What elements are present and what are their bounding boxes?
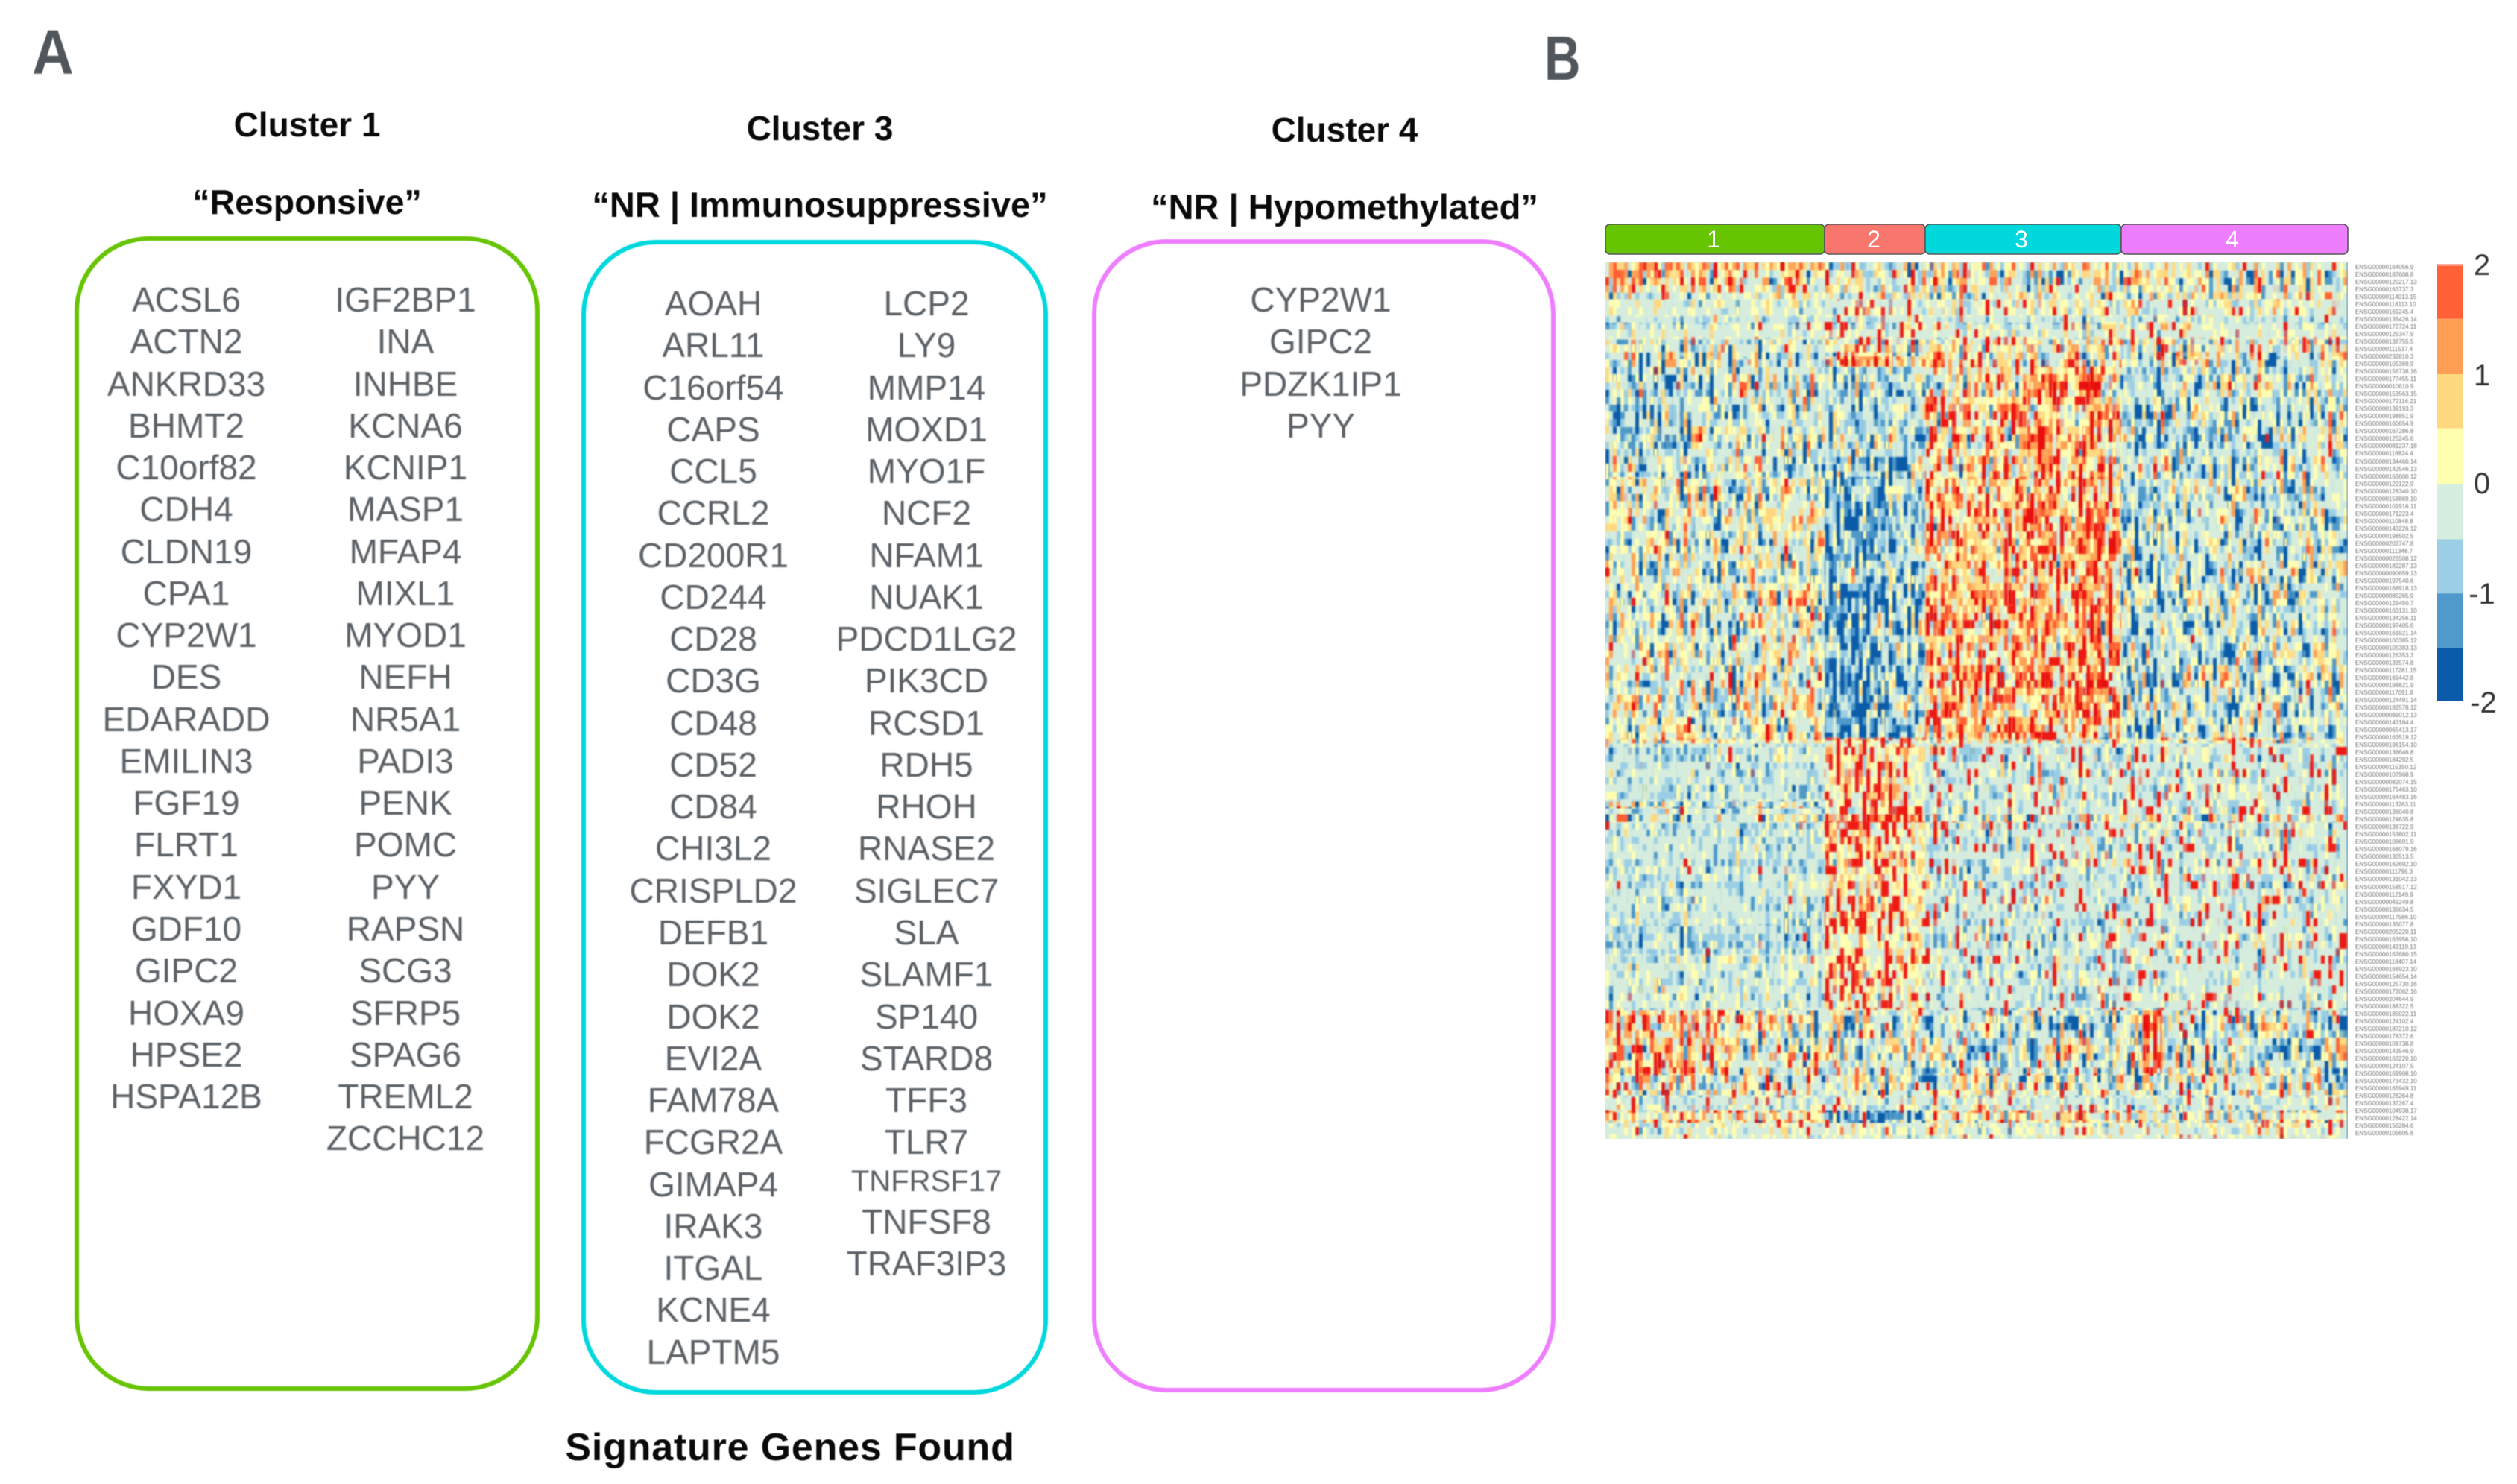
- gene list: cluster 1 column 1: CYP2W1: [116, 616, 257, 654]
- heatmap row labels: ENSG00000124102.4: [2355, 1018, 2414, 1025]
- gene list: cluster 3 column 2: SLAMF1: [860, 955, 993, 994]
- annotation: cluster 4: [2121, 224, 2348, 254]
- heatmap row labels: ENSG00000105383.13: [2355, 645, 2417, 651]
- gene list: cluster 4: CYP2W1: [1250, 280, 1392, 319]
- gene list: cluster 3 column 1: GIMAP4: [648, 1165, 778, 1204]
- gene list: cluster 3 column 1: IRAK3: [664, 1207, 762, 1245]
- gene list: cluster 1 column 1: EDARADD: [103, 700, 270, 739]
- gene list: cluster 1 column 2: SPAG6: [350, 1035, 461, 1074]
- heatmap row labels: ENSG00000131042.13: [2355, 876, 2417, 882]
- heatmap row labels: ENSG00000178372.6: [2355, 1033, 2414, 1040]
- main block, cluster 3: [1925, 367, 1983, 477]
- gene list: cluster 1 column 1: FXYD1: [131, 868, 241, 906]
- gene list: cluster 4: [1239, 280, 1402, 445]
- heatmap row labels: ENSG00000198851.9: [2355, 413, 2414, 420]
- heatmap row labels: ENSG00000171223.4: [2355, 511, 2414, 517]
- heatmap row labels: ENSG00000162692.10: [2355, 861, 2417, 868]
- panel: cluster 4 pink outline: [1092, 239, 1556, 1392]
- heatmap row labels: ENSG00000114013.15: [2355, 294, 2417, 300]
- heatmap row labels: ENSG00000118113.10: [2355, 301, 2416, 308]
- gene list: cluster 1 column 1: HOXA9: [128, 994, 244, 1032]
- colour scale legend: 2: [2474, 249, 2490, 282]
- heatmap row labels: ENSG00000101916.11: [2355, 503, 2417, 510]
- heatmap row labels: ENSG00000184292.5: [2355, 757, 2414, 763]
- caption: Signature Genes Found: Signature Genes Found: [565, 1426, 1015, 1469]
- heatmap row labels: ENSG00000138646.8: [2355, 749, 2414, 756]
- panel letter A: A: [32, 17, 74, 87]
- main block, cluster 1: [1605, 367, 1684, 477]
- heatmap row labels: ENSG00000175463.10: [2355, 786, 2417, 793]
- annotation: cluster 2: [1825, 224, 1925, 254]
- heatmap row labels: ENSG00000117091.8: [2355, 689, 2413, 696]
- heatmap row labels: ENSG00000125730.16: [2355, 981, 2417, 988]
- heatmap row labels: ENSG00000163220.10: [2355, 1055, 2417, 1062]
- heatmap row labels: ENSG00000124107.5: [2355, 1063, 2414, 1070]
- heatmap row labels: ENSG00000163131.10: [2355, 607, 2417, 614]
- heatmap row labels: ENSG00000232810.3: [2355, 353, 2414, 360]
- heatmap row labels: ENSG00000128422.14: [2355, 1115, 2417, 1122]
- heatmap row labels: ENSG00000109738.8: [2355, 1041, 2414, 1047]
- heatmap row labels: ENSG00000172116.21: [2355, 398, 2417, 405]
- heatmap row labels: ENSG00000122122.9: [2355, 481, 2414, 487]
- heatmap row labels: ENSG00000135077.8: [2355, 921, 2414, 928]
- heatmap row labels: ENSG00000169245.4: [2355, 309, 2414, 315]
- heatmap row labels: ENSG00000065413.17: [2355, 727, 2417, 733]
- heatmap row labels: ENSG00000154654.14: [2355, 973, 2417, 980]
- heatmap annotation bar with clusters 1 to 4: [1605, 224, 2348, 254]
- heatmap row labels: ENSG00000167286.8: [2355, 428, 2414, 435]
- colour scale legend: -1: [2469, 578, 2495, 610]
- gene list: cluster 4: GIPC2: [1269, 322, 1372, 361]
- heatmap row labels: ENSG00000104938.17: [2355, 1108, 2417, 1114]
- heatmap row labels: [2355, 264, 2417, 1137]
- heatmap row labels: ENSG00000177455.11: [2355, 376, 2417, 382]
- gene list: cluster 3 column 2: SIGLEC7: [854, 871, 999, 910]
- heatmap row labels: ENSG00000124635.8: [2355, 816, 2414, 823]
- heatmap row labels: ENSG00000130513.5: [2355, 853, 2414, 860]
- gene list: cluster 1 column 1: FGF19: [133, 783, 240, 822]
- gene list: cluster 1 column 1: CPA1: [143, 574, 230, 613]
- gene list: cluster 3 column 2: NUAK1: [869, 578, 984, 616]
- gene list: cluster 3 column 2: [836, 284, 1017, 1283]
- heatmap row labels: ENSG00000135426.14: [2355, 316, 2417, 323]
- heatmap row labels: ENSG00000172724.11: [2355, 323, 2417, 330]
- gene list: cluster 3 column 1: FAM78A: [648, 1081, 779, 1120]
- heatmap row labels: ENSG00000182287.13: [2355, 563, 2417, 569]
- colour scale legend: 0: [2474, 467, 2490, 500]
- heatmap row labels: ENSG00000204644.9: [2355, 996, 2414, 1003]
- gene list: cluster 3 column 1: CD3G: [666, 661, 761, 700]
- heatmap row labels: ENSG00000128340.10: [2355, 488, 2417, 495]
- gene list: cluster 3 column 1: C16orf54: [642, 368, 784, 407]
- heatmap row labels: ENSG00000111537.4: [2355, 346, 2413, 353]
- heatmap row labels: ENSG00000126353.3: [2355, 652, 2414, 659]
- heading: Cluster 1: Cluster 1: [234, 105, 380, 144]
- heatmap row labels: ENSG00000108691.9: [2355, 839, 2414, 845]
- heatmap row labels: ENSG00000172062.16: [2355, 988, 2417, 995]
- gene list: cluster 3 column 1: KCNE4: [656, 1290, 771, 1329]
- heatmap row labels: ENSG00000125347.9: [2355, 331, 2414, 338]
- heatmap row labels: ENSG00000198502.5: [2355, 533, 2414, 540]
- heatmap row labels: ENSG00000115350.12: [2355, 764, 2417, 771]
- heatmap row labels: ENSG00000111348.7: [2355, 548, 2413, 555]
- heatmap row labels: ENSG00000138722.9: [2355, 824, 2414, 830]
- heatmap row labels: ENSG00000081237.18: [2355, 443, 2417, 449]
- heatmap row labels: ENSG00000136634.5: [2355, 906, 2414, 913]
- panel A: signature gene lists: [32, 17, 1556, 1469]
- heatmap row labels: ENSG00000168079.16: [2355, 846, 2417, 853]
- gene list: cluster 3 column 2: RCSD1: [868, 704, 985, 742]
- gene list: cluster 1 column 1: BHMT2: [128, 406, 244, 445]
- heatmap row labels: ENSG00000156284.6: [2355, 1123, 2414, 1129]
- gene list: cluster 3 column 2: TRAF3IP3: [847, 1244, 1006, 1283]
- heatmap row labels: ENSG00000197405.6: [2355, 622, 2414, 629]
- heatmap row labels: ENSG00000113263.11: [2355, 801, 2416, 808]
- gene list: cluster 3 column 2: TLR7 TNFSF8: [862, 1123, 991, 1241]
- heatmap row labels: ENSG00000124491.14: [2355, 697, 2417, 704]
- heatmap row labels: ENSG00000136040.8: [2355, 809, 2414, 815]
- heatmap row labels: ENSG00000118407.14: [2355, 959, 2417, 965]
- gene list: cluster 3 column 2: RDH5: [879, 745, 973, 784]
- gene list: cluster 1 column 2: SCG3: [359, 951, 452, 990]
- gene list: cluster 1 column 1: HSPA12B: [110, 1077, 262, 1116]
- heatmap row labels: ENSG00000010610.9: [2355, 383, 2414, 390]
- gene list: cluster 4: PDZK1IP1: [1239, 364, 1402, 403]
- heatmap row labels: ENSG00000164483.16: [2355, 794, 2417, 801]
- gene list: cluster 1 column 1: GDF10: [131, 909, 241, 948]
- panel: cluster 1 green outline: [75, 236, 540, 1391]
- gene list: cluster 3 column 2: TNFRSF17: [851, 1165, 1002, 1198]
- heatmap row labels: ENSG00000158869.10: [2355, 496, 2417, 502]
- heatmap row labels: ENSG00000089012.13: [2355, 712, 2417, 719]
- gene list: cluster 1 column 2: NEFH: [359, 657, 452, 696]
- heatmap row labels: ENSG00000187608.8: [2355, 271, 2414, 278]
- gene list: cluster 3 column 2: TFF3: [885, 1081, 967, 1120]
- gene list: cluster 1 column 1: [103, 280, 270, 1116]
- heatmap row labels: ENSG00000134460.14: [2355, 458, 2417, 465]
- gene list: cluster 3 column 1: CHI3L2: [655, 829, 771, 868]
- gene list: cluster 3 column 2: STARD8: [860, 1039, 993, 1078]
- gene list: cluster 1 column 2: INHBE: [353, 364, 458, 403]
- main block, cluster 2: [1825, 367, 1925, 462]
- heatmap row labels: ENSG00000129450.7: [2355, 600, 2414, 607]
- heatmap row labels: ENSG00000182578.12: [2355, 704, 2417, 711]
- heatmap row labels: ENSG00000090659.13: [2355, 570, 2417, 577]
- annotation: cluster 3: 3: [2015, 226, 2028, 253]
- gene list: cluster 3 column 2: SLA: [894, 913, 959, 952]
- heatmap row labels: ENSG00000168918.13: [2355, 585, 2417, 592]
- gene list: cluster 1 column 2: PADI3: [357, 742, 454, 780]
- gene list: cluster 1 column 2: RAPSN: [347, 909, 464, 948]
- heatmap row labels: ENSG00000205220.11: [2355, 929, 2417, 935]
- gene list: cluster 3 column 1: CD244: [660, 578, 767, 616]
- heatmap row labels: ENSG00000139193.3: [2355, 405, 2414, 412]
- gene list: cluster 1 column 2: MFAP4: [350, 532, 461, 571]
- heatmap row labels: ENSG00000111796.3: [2355, 868, 2413, 875]
- gene list: cluster 3 column 1: DOK2: [666, 997, 760, 1036]
- gene list: cluster 3 column 2: MMP14: [868, 368, 985, 407]
- heatmap row labels: ENSG00000166923.10: [2355, 966, 2417, 973]
- gene list: cluster 3 column 2: PDCD1LG2: [836, 619, 1017, 658]
- heatmap row labels: ENSG00000173432.10: [2355, 1078, 2417, 1084]
- annotation: cluster 2: 2: [1867, 226, 1880, 253]
- gene list: cluster 1 column 1: HPSE2: [130, 1035, 242, 1074]
- heatmap row labels: ENSG00000161921.14: [2355, 630, 2417, 637]
- heatmap row labels: ENSG00000185022.11: [2355, 1011, 2417, 1017]
- gene list: cluster 1 column 2: KCNIP1: [344, 448, 467, 487]
- gene list: cluster 1 column 2: TREML2: [338, 1077, 473, 1116]
- heatmap row labels: ENSG00000203747.8: [2355, 540, 2414, 547]
- heading: Cluster 4: Cluster 4: [1272, 110, 1418, 149]
- gene list: cluster 1 column 2: MIXL1: [356, 574, 455, 613]
- gene list: cluster 1 column 2: PENK: [359, 783, 452, 822]
- heatmap cells: [1605, 262, 2348, 1139]
- gene list: cluster 1 column 1: GIPC2: [135, 951, 238, 990]
- main block, cluster 4: [2121, 367, 2161, 738]
- annotation: cluster 3: [1925, 224, 2121, 254]
- panel letter B: B: [1544, 23, 1581, 93]
- gene list: cluster 1 column 2: IGF2BP1: [335, 280, 476, 319]
- gene list: cluster 3 column 2: NFAM1: [869, 536, 984, 575]
- heatmap row labels: ENSG00000169442.8: [2355, 675, 2414, 681]
- gene list: cluster 3 column 1: DEFB1: [658, 913, 768, 952]
- gene list: cluster 1 column 2: KCNA6: [348, 406, 463, 445]
- annotation: cluster 1: [1605, 224, 1825, 254]
- gene list: cluster 1 column 1: ACSL6: [132, 280, 241, 319]
- gene list: cluster 3 column 2: RNASE2: [858, 829, 995, 868]
- heatmap row labels: ENSG00000085265.9: [2355, 593, 2414, 599]
- heatmap row labels: ENSG00000163519.12: [2355, 734, 2417, 741]
- gene list: cluster 1 column 2: NR5A1: [350, 700, 461, 739]
- heatmap row labels: ENSG00000167680.15: [2355, 951, 2417, 958]
- gene list: cluster 3 column 1: AOAH: [665, 284, 762, 323]
- heatmap row labels: ENSG00000112149.9: [2355, 891, 2413, 898]
- gene list: cluster 3 column 1: CCL5: [669, 452, 757, 490]
- heatmap row labels: ENSG00000138755.5: [2355, 338, 2414, 345]
- heatmap row labels: ENSG00000117586.10: [2355, 914, 2417, 921]
- heatmap row labels: ENSG00000134256.11: [2355, 615, 2417, 622]
- heatmap row labels: ENSG00000143546.9: [2355, 1048, 2414, 1055]
- heatmap row labels: ENSG00000026508.12: [2355, 555, 2417, 562]
- heatmap row labels: ENSG00000105369.9: [2355, 361, 2414, 367]
- heatmap row labels: ENSG00000163600.12: [2355, 473, 2417, 480]
- gene list: cluster 1 column 1: ACTN2: [130, 322, 242, 361]
- heatmap row labels: ENSG00000156738.16: [2355, 368, 2417, 375]
- heatmap row labels: ENSG00000133574.8: [2355, 660, 2414, 666]
- heatmap row labels: ENSG00000137267.4: [2355, 1100, 2414, 1107]
- heatmap row labels: ENSG00000198821.9: [2355, 682, 2414, 689]
- gene list: cluster 3 column 1: DOK2: [666, 955, 760, 994]
- gene list: cluster 1 column 1: ANKRD33: [107, 364, 265, 403]
- heatmap row labels: ENSG00000105605.6: [2355, 1130, 2414, 1137]
- heading: NR Hypomethylated: “NR | Hypomethylated”: [1151, 187, 1538, 227]
- heatmap row labels: ENSG00000143184.4: [2355, 719, 2414, 726]
- gene list: cluster 3 column 2: PIK3CD: [865, 661, 988, 700]
- heatmap row labels: ENSG00000187210.12: [2355, 1026, 2417, 1032]
- gene list: cluster 1 column 2: SFRP5: [350, 994, 461, 1032]
- heatmap row labels: ENSG00000158517.12: [2355, 884, 2417, 891]
- gene list: cluster 3 column 2: LCP2: [883, 284, 970, 323]
- heatmap row labels: ENSG00000196154.10: [2355, 742, 2417, 748]
- heatmap row labels: ENSG00000153563.15: [2355, 391, 2417, 397]
- gene list: cluster 1 column 1: DES: [151, 657, 221, 696]
- gene list: cluster 3 column 1: CRISPLD2: [630, 871, 797, 910]
- gene list: cluster 3 column 2: SP140: [875, 997, 978, 1036]
- gene list: cluster 3 column 1: CAPS: [666, 410, 760, 449]
- heatmap row labels: ENSG00000164056.9: [2355, 264, 2414, 271]
- heatmap row labels: ENSG00000110848.8: [2355, 518, 2413, 525]
- heatmap row labels: ENSG00000165949.11: [2355, 1085, 2417, 1092]
- gene list: cluster 1 column 1: C10orf82: [116, 448, 257, 487]
- gene list: cluster 3 column 1: CD52: [669, 745, 757, 784]
- heatmap row labels: ENSG00000125245.6: [2355, 435, 2414, 442]
- gene list: cluster 3 column 2: RHOH: [876, 787, 977, 826]
- heatmap row labels: ENSG00000100385.12: [2355, 637, 2417, 644]
- gene list: cluster 1 column 1: CDH4: [139, 490, 233, 528]
- gene list: cluster 1 column 2: [326, 280, 484, 1158]
- gene list: cluster 3 column 1: CD48: [669, 704, 757, 742]
- gene list: cluster 1 column 1: CLDN19: [121, 532, 252, 571]
- heatmap row labels: ENSG00000197540.6: [2355, 578, 2414, 584]
- gene list: cluster 3 column 1: LAPTM5: [647, 1333, 780, 1371]
- annotation: cluster 1: 1: [1707, 226, 1720, 253]
- heatmap row labels: ENSG00000117281.15: [2355, 667, 2417, 674]
- gene list: cluster 3 column 1: CD28: [669, 619, 757, 658]
- gene list: cluster 3 column 1: CD200R1: [638, 536, 789, 575]
- gene list: cluster 3 column 2: LY9: [897, 326, 956, 364]
- heatmap row labels: ENSG00000126264.8: [2355, 1093, 2414, 1099]
- gene list: cluster 1 column 2: MYOD1: [344, 616, 467, 654]
- heatmap row labels: ENSG00000116824.4: [2355, 450, 2413, 457]
- gene list: cluster 3 column 2: MOXD1: [865, 410, 988, 449]
- panel: cluster 3 cyan outline: [581, 240, 1048, 1395]
- block at bottom: [1605, 1010, 1729, 1073]
- heatmap row labels: ENSG00000049249.8: [2355, 899, 2414, 906]
- colour scale legend: 1: [2474, 359, 2490, 392]
- heatmap row labels: ENSG00000143226.12: [2355, 525, 2417, 532]
- heatmap row labels: ENSG00000169908.10: [2355, 1070, 2417, 1077]
- gene list: cluster 3 column 1: CCRL2: [657, 493, 769, 532]
- gene list: cluster 3 column 1: ITGAL: [664, 1248, 762, 1287]
- heatmap row labels: ENSG00000160654.9: [2355, 420, 2414, 427]
- gene list: cluster 3 column 1: CD84: [669, 787, 757, 826]
- heading: Responsive: “Responsive”: [192, 183, 422, 221]
- colour scale legend: [2437, 249, 2497, 719]
- gene list: cluster 1 column 2: ZCCHC12: [326, 1119, 484, 1158]
- heading: Cluster 3: Cluster 3: [747, 109, 893, 148]
- gene list: cluster 3 column 2: MYO1F: [868, 452, 985, 490]
- gene list: cluster 3 column 1: ARL11: [662, 326, 765, 364]
- heatmap row labels: ENSG00000163956.10: [2355, 936, 2417, 943]
- gene list: cluster 4: PYY: [1286, 406, 1355, 445]
- annotation: cluster 4: 4: [2226, 226, 2239, 253]
- gene list: cluster 1 column 1: FLRT1: [134, 825, 239, 864]
- gene list: cluster 3 column 1: EVI2A: [665, 1039, 762, 1078]
- gene list: cluster 3 column 1: [630, 284, 797, 1371]
- heading: NR Immunosuppressive: “NR | Immunosuppressive”: [592, 185, 1048, 224]
- gene list: cluster 3 column 1: FCGR2A: [644, 1123, 783, 1161]
- colour scale legend: -2: [2470, 686, 2497, 719]
- gene list: cluster 1 column 1: EMILIN3: [120, 742, 253, 780]
- heatmap row labels: ENSG00000107968.9: [2355, 771, 2414, 778]
- heatmap row labels: ENSG00000188322.5: [2355, 1003, 2414, 1010]
- heatmap row labels: ENSG00000153802.11: [2355, 831, 2417, 838]
- heatmap row labels: ENSG00000143119.13: [2355, 944, 2417, 950]
- gene list: cluster 1 column 2: PYY: [371, 868, 440, 906]
- heatmap row labels: ENSG00000120217.13: [2355, 279, 2417, 285]
- gene list: cluster 1 column 2: POMC: [354, 825, 457, 864]
- gene list: cluster 3 column 2: NCF2: [882, 493, 971, 532]
- gene list: cluster 1 column 2: INA: [377, 322, 434, 361]
- heatmap row labels: ENSG00000163737.3: [2355, 286, 2414, 293]
- hi-contrast bands in lower block: [1605, 738, 2348, 744]
- heatmap row labels: ENSG00000082074.15: [2355, 779, 2417, 786]
- gene list: cluster 1 column 2: MASP1: [347, 490, 464, 528]
- heatmap row labels: ENSG00000142546.13: [2355, 466, 2417, 473]
